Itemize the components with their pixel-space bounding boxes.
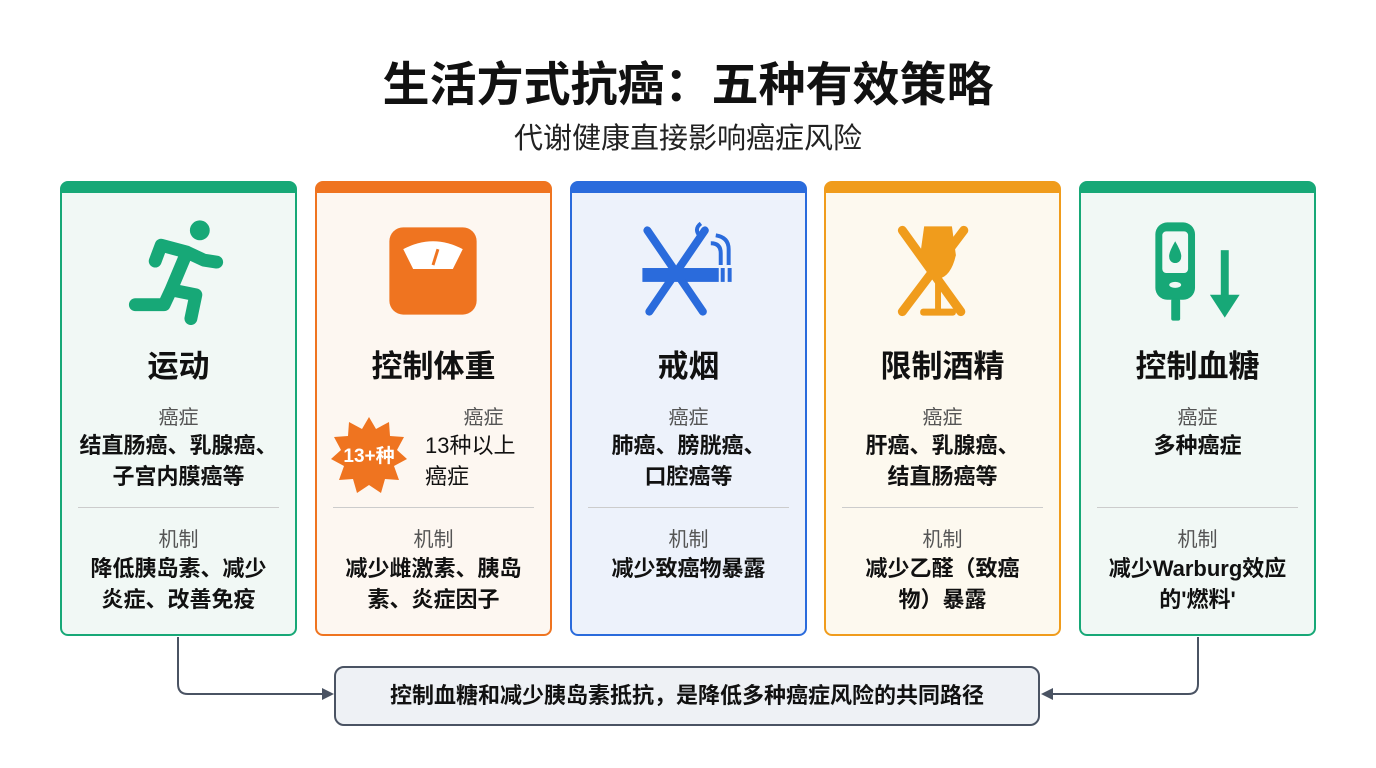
- text: mechanism: 减少致癌物暴露: [611, 556, 766, 581]
- callout: common path: 控制血糖和减少胰岛素抵抗，是降低多种癌症风险的共同路径: [390, 683, 984, 708]
- text: cancers: 结直肠癌等: [887, 464, 998, 489]
- text: mechanism: 物）暴露: [898, 587, 986, 612]
- icon: no smoking: [642, 222, 732, 316]
- text: cancers: [425, 433, 515, 489]
- heading: 控制血糖: [1136, 349, 1260, 384]
- text: mechanism: 素、炎症因子: [367, 587, 500, 612]
- text: mechanism: 减少雌激素、胰岛: [345, 556, 522, 581]
- label: cancers: 癌症: [922, 407, 962, 429]
- label: mechanism: 机制: [1178, 529, 1218, 551]
- heading: 戒烟: [658, 349, 720, 384]
- text: mechanism: 炎症、改善免疫: [101, 587, 256, 612]
- text: mechanism: [345, 556, 522, 612]
- text: cancers: 13种以上: [425, 433, 515, 458]
- text: cancers: 肝癌、乳腺癌、: [865, 433, 1020, 458]
- icon: no alcohol: [898, 226, 968, 316]
- subtitle: 代谢健康直接影响癌症风险: [514, 123, 862, 155]
- icon: runner: [128, 220, 224, 325]
- callout: common path: [334, 666, 1040, 726]
- text: cancers: 口腔癌等: [644, 464, 732, 489]
- panel: smoking: [570, 181, 807, 636]
- label: cancers: 癌症: [668, 407, 708, 429]
- text: mechanism: [90, 556, 266, 612]
- badge: 13+: [331, 417, 407, 493]
- text: mechanism: 减少乙醛（致癌: [865, 556, 1020, 581]
- label: mechanism: 机制: [922, 529, 962, 551]
- label: cancers: 癌症: [1178, 407, 1218, 429]
- label: cancers: 癌症: [464, 407, 504, 429]
- panel: alcohol: [824, 181, 1061, 636]
- badge: 13+: 13+种: [343, 445, 395, 467]
- text: mechanism: 降低胰岛素、减少: [90, 556, 266, 581]
- panel: exercise: [60, 181, 297, 636]
- panel: blood sugar: [1079, 181, 1316, 636]
- text: mechanism: 减少Warburg效应: [1109, 556, 1286, 581]
- heading: 限制酒精: [880, 349, 1004, 384]
- heading: 控制体重: [372, 349, 496, 384]
- text: cancers: 子宫内膜癌等: [112, 464, 244, 489]
- text: cancers: [79, 433, 278, 489]
- text: cancers: 多种癌症: [1153, 433, 1242, 458]
- text: mechanism: [865, 556, 1020, 612]
- label: mechanism: 机制: [668, 529, 708, 551]
- title: 生活方式抗癌：五种有效策略: [382, 58, 994, 111]
- label: mechanism: 机制: [414, 529, 454, 551]
- text: cancers: 肺癌、膀胱癌、: [611, 433, 766, 458]
- text: cancers: 结直肠癌、乳腺癌、: [79, 433, 278, 458]
- heading: 运动: [148, 349, 210, 384]
- text: mechanism: [1109, 556, 1286, 612]
- text: mechanism: 的'燃料': [1159, 587, 1236, 612]
- text: cancers: [865, 433, 1020, 489]
- icon: glucose meter: [1155, 222, 1240, 321]
- label: cancers: 癌症: [158, 407, 198, 429]
- panel: weight: [315, 181, 552, 636]
- icon: scale: [389, 227, 477, 315]
- label: mechanism: 机制: [158, 529, 198, 551]
- text: cancers: 癌症: [425, 464, 469, 489]
- text: cancers: [611, 433, 766, 489]
